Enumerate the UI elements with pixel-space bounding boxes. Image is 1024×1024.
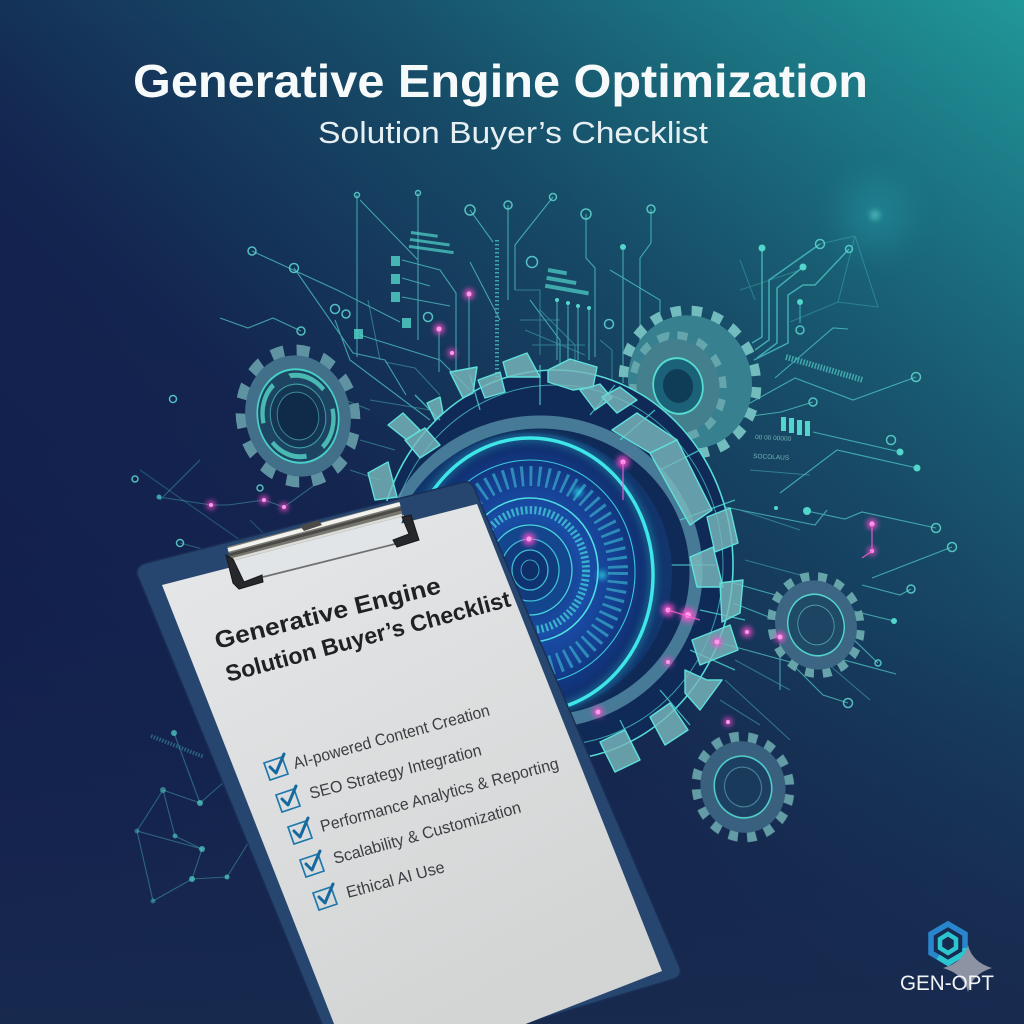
- checklist items: AI-powered Content Creation: [291, 702, 492, 773]
- gear: upper left: [233, 344, 363, 488]
- circuit network lines: [137, 193, 952, 901]
- logo: [900, 924, 994, 995]
- logo text: GEN-OPT: [900, 972, 994, 995]
- title: Generative Engine Optimization: [133, 55, 868, 107]
- glow lights: [207, 289, 877, 726]
- metal clip: [226, 504, 419, 589]
- checkboxes: [264, 754, 337, 910]
- logo hexagon: [931, 924, 965, 963]
- micro labels: SOCOLAUS: [753, 453, 790, 462]
- checklist items: Ethical AI Use: [344, 858, 447, 902]
- checklist items: [291, 702, 561, 902]
- gear: lower right: [689, 730, 797, 844]
- gear teeth: [368, 353, 743, 772]
- clipboard: [137, 482, 680, 1024]
- board: [137, 482, 680, 1024]
- checklist items: SEO Strategy Integration: [308, 741, 483, 803]
- gear: upper right pair: [612, 300, 768, 464]
- logo sparkle: [943, 945, 992, 992]
- micro labels: 00 00 00000: [755, 434, 792, 443]
- checklist items: Scalability & Customization: [331, 799, 523, 868]
- checklist heading: Generative Engine: [212, 572, 444, 655]
- gear: middle right: [764, 570, 868, 680]
- micro labels: [753, 434, 792, 462]
- filled nodes and data chips: [134, 231, 920, 903]
- rim panels: [415, 365, 745, 760]
- circuit nodes: [132, 190, 956, 708]
- paper sheet: [162, 504, 662, 1024]
- checklist items: Performance Analytics & Reporting: [318, 755, 561, 836]
- subtitle: Solution Buyer’s Checklist: [318, 115, 708, 150]
- checklist heading: Solution Buyer’s Checklist: [223, 586, 514, 687]
- central gear: [368, 353, 745, 772]
